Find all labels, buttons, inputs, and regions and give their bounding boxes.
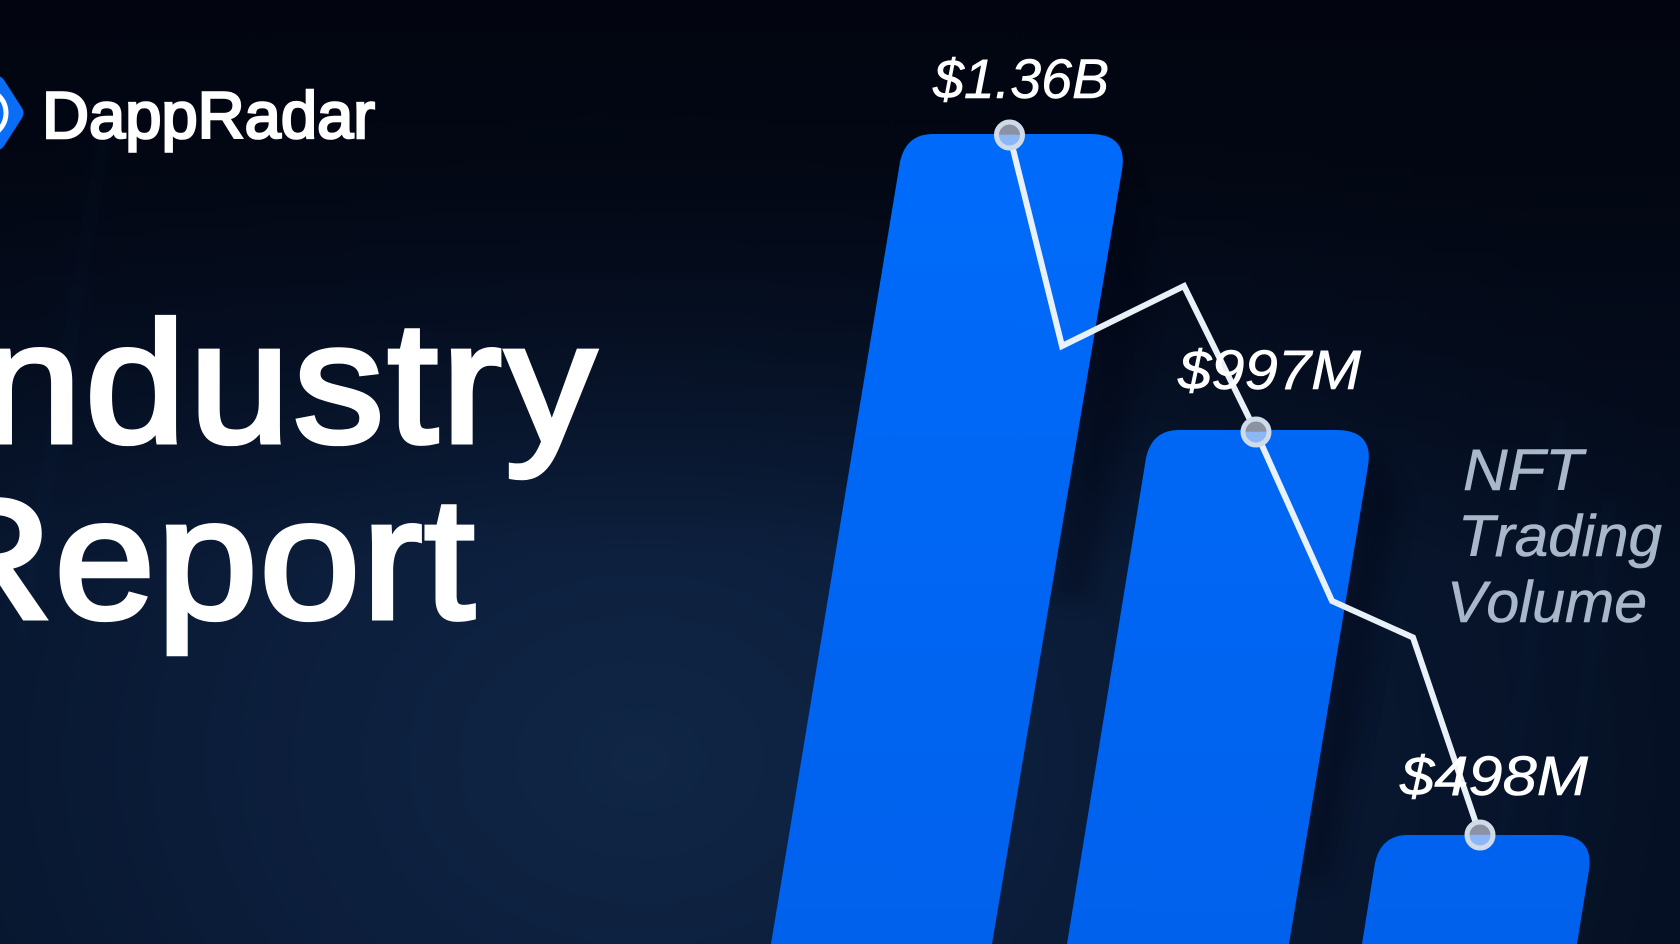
- value label: $997M: $997M: [1177, 338, 1361, 401]
- bar: $997M: [1067, 430, 1369, 944]
- chart label: NFT Trading Volume: [1447, 438, 1662, 635]
- bar chart: NFT trading volume: [771, 47, 1662, 944]
- bar shadows: [1050, 160, 1400, 880]
- bar: $1.36B: [771, 134, 1123, 944]
- title: Industry Report: [0, 287, 600, 655]
- data point: $997M: [1243, 419, 1269, 445]
- value label: $1.36B: $1.36B: [932, 47, 1109, 110]
- data point: $498M: [1467, 822, 1493, 848]
- logo wordmark: DappRadar: [42, 78, 375, 152]
- chart label: NFT Trading Volume: Trading: [1458, 504, 1662, 569]
- logo: DappRadar: [0, 76, 375, 152]
- value label: $498M: $498M: [1399, 744, 1588, 807]
- chart label: NFT Trading Volume: NFT: [1463, 438, 1587, 503]
- chart label: NFT Trading Volume: Volume: [1447, 570, 1647, 635]
- bar: $498M: [1362, 835, 1590, 944]
- trend line: [1010, 135, 1480, 835]
- icon: hexagon logo mark: [0, 76, 24, 150]
- data point: $1.36B: [996, 122, 1022, 148]
